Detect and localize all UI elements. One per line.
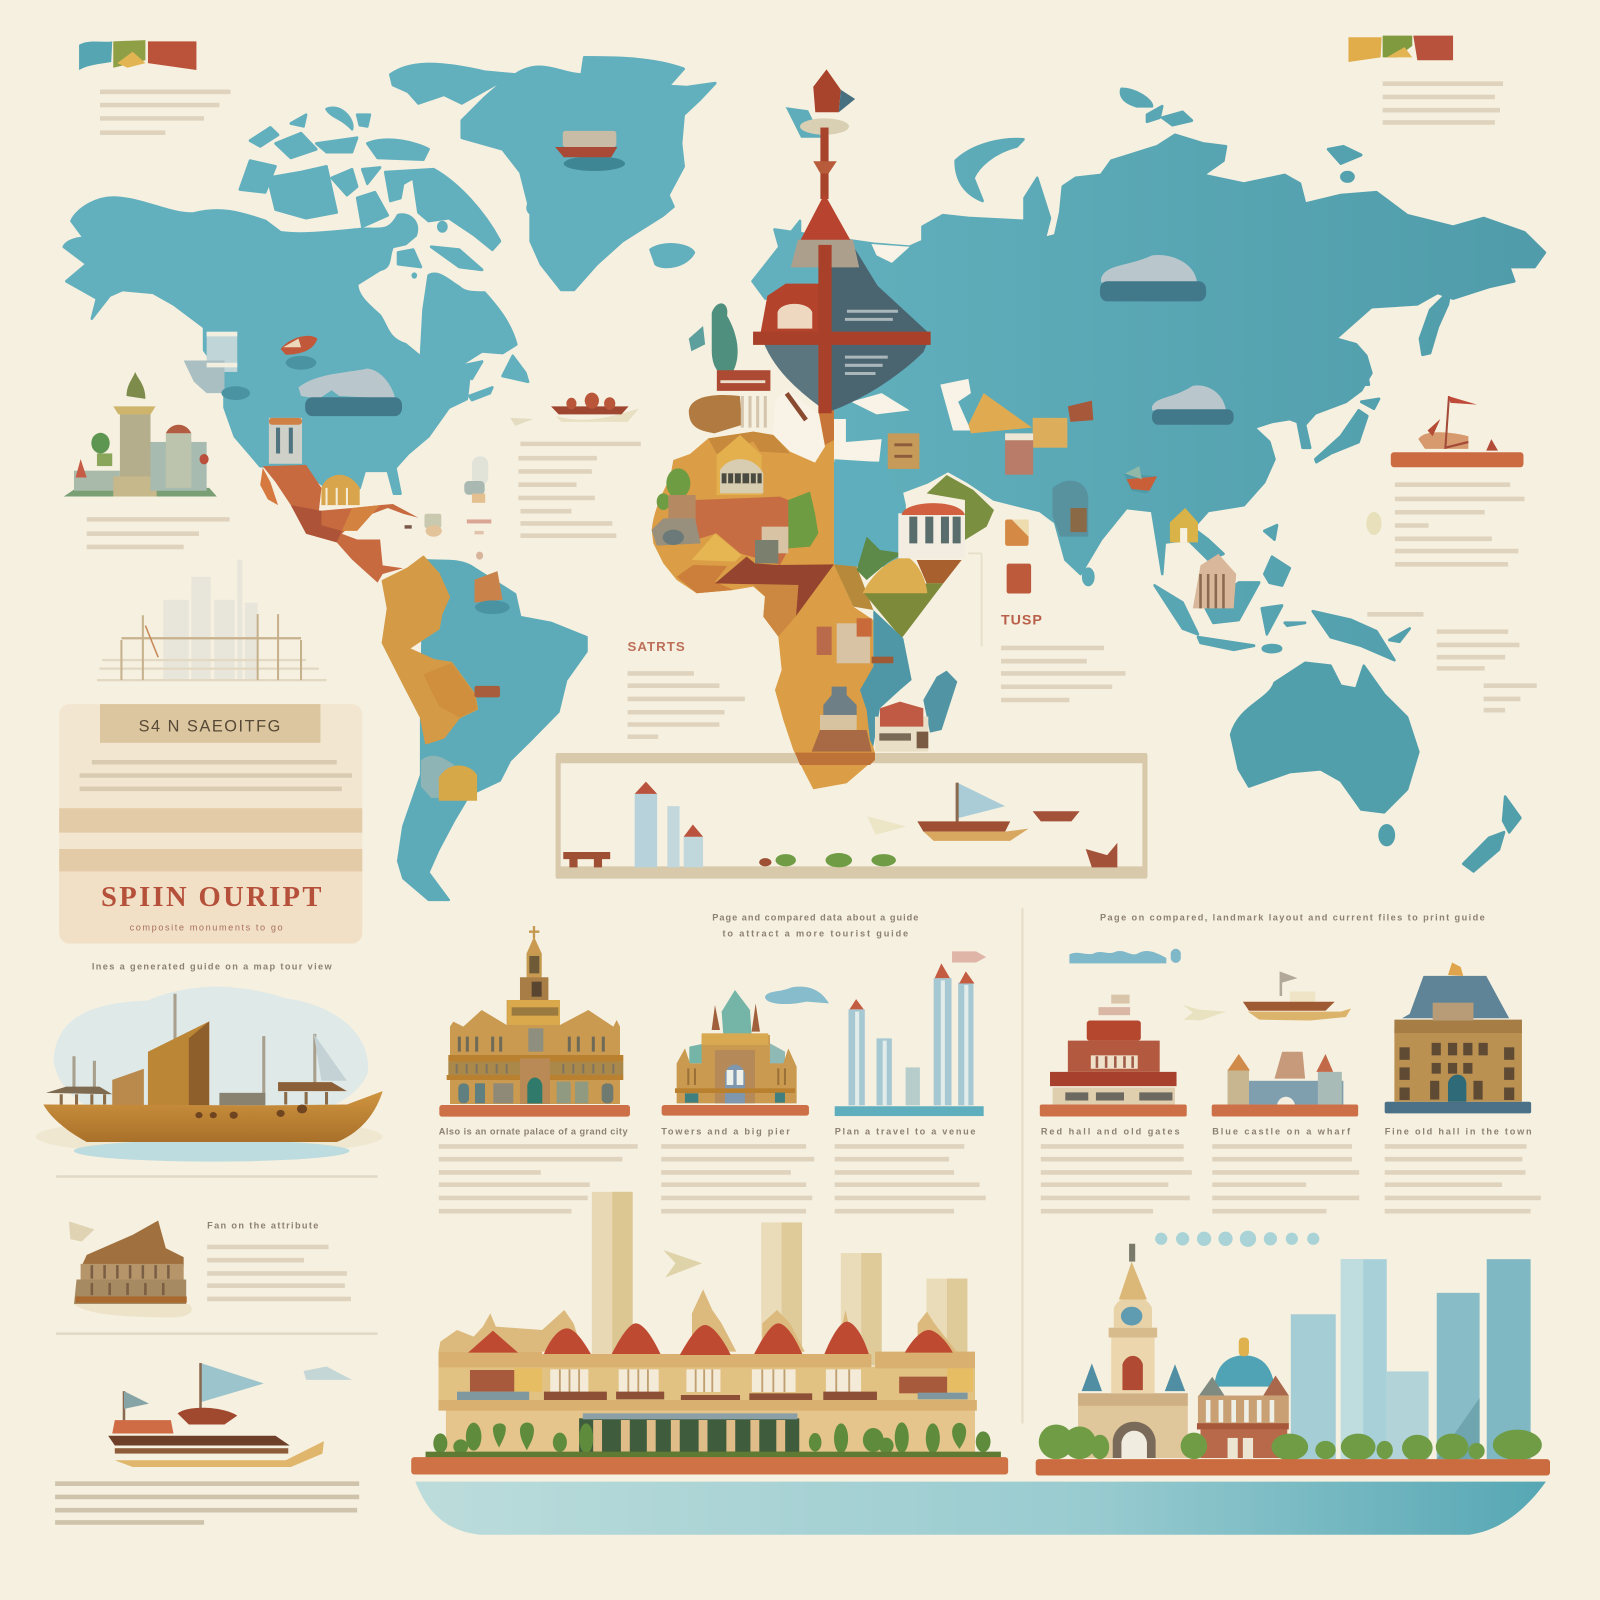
base: skyline plinth (1036, 1459, 1550, 1476)
water band (415, 1482, 1546, 1535)
left castle (64, 372, 217, 496)
palace body (438, 1367, 975, 1410)
palace window sills (544, 1392, 877, 1400)
africa: bottle monument (812, 687, 872, 752)
africa: madagascar (923, 671, 957, 733)
building row: blue castle (1212, 1052, 1358, 1117)
building row: teal dome hall (662, 990, 809, 1116)
domed hall (1197, 1338, 1289, 1458)
heading: south atlantic note: SATRTS (628, 639, 685, 654)
mexico monument (269, 418, 360, 505)
palace colonnade (579, 1413, 799, 1453)
panel lower band (59, 849, 362, 871)
small boat on north america (281, 336, 317, 370)
west coast skyline fragment (184, 332, 250, 400)
vertical divider (1021, 908, 1023, 1423)
europe: uk, north african blob and red house (689, 303, 770, 433)
caption: centre (712, 912, 918, 939)
panel header text: S4 N SAEOITFG (139, 718, 282, 736)
decorative dots row (1155, 1231, 1319, 1247)
landmass: central america (260, 465, 418, 583)
tower striped collar (791, 240, 859, 267)
palace windows (550, 1369, 861, 1392)
caption: centre: to attract a more tourist guide (722, 929, 908, 939)
red pacific boat (1391, 396, 1523, 467)
illustration: grand palace (426, 1192, 1001, 1458)
cloud near column 2 (765, 987, 829, 1004)
illustration: wooden ship (36, 987, 383, 1162)
building row: ornate palace (439, 926, 630, 1117)
column text: 2: Towers and a big pier (661, 1127, 790, 1137)
africa: northern band (708, 432, 790, 454)
pale skyline (97, 560, 327, 680)
africa: small monument (755, 527, 788, 563)
ship on greenland (555, 131, 625, 171)
building row: glass towers (835, 951, 986, 1116)
africa: west greenery and rocks (652, 468, 701, 546)
palace fish icon (663, 1250, 702, 1278)
cut-outs: mediterranean sea (833, 244, 971, 462)
africa: silhouette (652, 410, 875, 789)
frame top and bottom bars (556, 753, 1147, 879)
panel header plate (100, 704, 320, 743)
illustration: small rotunda (69, 1221, 192, 1317)
illustration: skyline with clock tower (1039, 1244, 1542, 1461)
africa: frame shadow band (795, 753, 875, 765)
palace side wings (457, 1368, 973, 1400)
column text: 6: Fine old hall in the town (1385, 1127, 1532, 1137)
clouds over asia (1100, 255, 1234, 425)
column text: 1 (439, 1127, 638, 1211)
legend: top right (1348, 36, 1453, 62)
africa: central lobe (753, 585, 798, 637)
flying boat and fish (1183, 971, 1351, 1021)
atlantic pale islets (405, 456, 491, 560)
panel band (59, 808, 362, 833)
africa: red house (875, 702, 928, 752)
column text: 1: Also is an ornate palace of a grand city (439, 1127, 628, 1137)
column text: 3: Plan a travel to a venue (835, 1127, 976, 1137)
panel: inset frame (556, 753, 1147, 879)
text block: atlantic (518, 444, 641, 536)
text block: top right (1383, 84, 1503, 122)
world map (64, 57, 1545, 900)
africa: arabia green (927, 475, 994, 540)
africa: moroccan house (717, 435, 763, 495)
column text: 3 (835, 1127, 986, 1211)
palace building detail (426, 1289, 1001, 1458)
text block: top left (100, 92, 231, 133)
palace finials and upper mass (438, 1289, 956, 1352)
tower grilles (845, 311, 898, 373)
text block: lower left (55, 1484, 359, 1522)
heading: indian ocean note: TUSP (1001, 612, 1042, 628)
text block: pacific (1395, 485, 1524, 564)
palace roofs (468, 1322, 953, 1355)
inset towers (635, 782, 703, 867)
south america blocks (421, 571, 510, 801)
panel title: SPIIN OURIPT (101, 882, 321, 913)
palace background towers (592, 1192, 967, 1370)
legend: top left (79, 40, 196, 70)
small block icons (1005, 519, 1031, 593)
text block: rotunda note (207, 1247, 351, 1299)
text block: near australia (1367, 614, 1537, 710)
heading: rotunda note: Fan on the attribute (207, 1221, 318, 1231)
inset right icon (1086, 843, 1117, 867)
africa: dark sahel band (715, 557, 834, 616)
frame (558, 757, 1145, 874)
text block: indian ocean (1001, 648, 1126, 700)
palace cornices (438, 1352, 977, 1411)
inset shrubs (759, 853, 896, 867)
column text: 5: Blue castle on a wharf (1212, 1127, 1351, 1137)
inset left icon (563, 852, 610, 867)
landmass: north america (64, 57, 800, 494)
africa: central trees (788, 492, 818, 548)
cloud strip (1069, 949, 1181, 963)
cloud over north america (298, 368, 402, 416)
africa: east coast sea (860, 610, 912, 747)
tower cross bands (753, 245, 931, 413)
panel: spin ouript card (59, 704, 362, 944)
panel subtitle: composite monuments to go (130, 923, 283, 933)
landmass: africa (652, 390, 994, 789)
building row: red hall (1040, 995, 1187, 1117)
base: palace plinth (411, 1457, 1008, 1474)
inset flag boat (867, 783, 1080, 841)
tower red hall (760, 284, 824, 335)
caption: right: Page on compared, landmark layout and current files to print guide (1100, 912, 1485, 922)
africa: olive strip (834, 564, 873, 610)
landmass: eurasia (774, 89, 1545, 660)
panel background (59, 704, 362, 944)
column text: 4 (1041, 1127, 1192, 1211)
panel lower box (59, 849, 362, 943)
africa: north strip (818, 410, 834, 445)
landmass: south america (383, 557, 587, 900)
palace hedge strip (426, 1452, 1001, 1458)
palace garden trees (433, 1422, 991, 1454)
glass towers (1291, 1259, 1531, 1459)
africa: east landmark (817, 618, 893, 663)
text block: under castle (87, 519, 230, 547)
tower dome window (778, 304, 812, 329)
column text: 4: Red hall and old gates (1041, 1127, 1180, 1137)
column text: 2 (661, 1127, 814, 1211)
text block: south atlantic (628, 673, 745, 737)
tower left pane (763, 342, 824, 410)
column text: 5 (1212, 1127, 1359, 1211)
africa: horn (857, 537, 962, 638)
caption: centre: Page and compared data about a guide (712, 912, 918, 922)
divider: left column (56, 1177, 378, 1334)
africa: arabia blue (834, 462, 903, 563)
atlantic boat (510, 393, 639, 426)
palace window bars (560, 1369, 849, 1392)
africa: white pavilion (898, 503, 965, 558)
africa: yellow pyramid (692, 533, 742, 562)
panel lines (80, 762, 352, 789)
landmass: australia (1231, 663, 1520, 871)
tower dark cone (824, 199, 931, 413)
africa: terracotta region (695, 497, 797, 565)
caption above ship: Ines a generated guide on a map tour view (92, 961, 332, 971)
africa: lower-left band (677, 565, 733, 593)
asia overlays (888, 393, 1382, 608)
palace ground floor (446, 1410, 975, 1453)
tower roof (798, 194, 853, 245)
africa: italy stroke (787, 393, 806, 420)
illustration: flag boat (108, 1363, 352, 1467)
indian ocean guide line (968, 553, 982, 647)
central tower landmark (753, 69, 931, 413)
map landmarks and overlays (64, 131, 1523, 801)
column text: 6 (1385, 1127, 1541, 1211)
clock tower (1078, 1244, 1188, 1458)
skyline trees (1039, 1424, 1542, 1461)
building row: chateau (1385, 962, 1531, 1113)
africa: mediterranean gap (773, 390, 827, 463)
tower finial (786, 69, 855, 199)
